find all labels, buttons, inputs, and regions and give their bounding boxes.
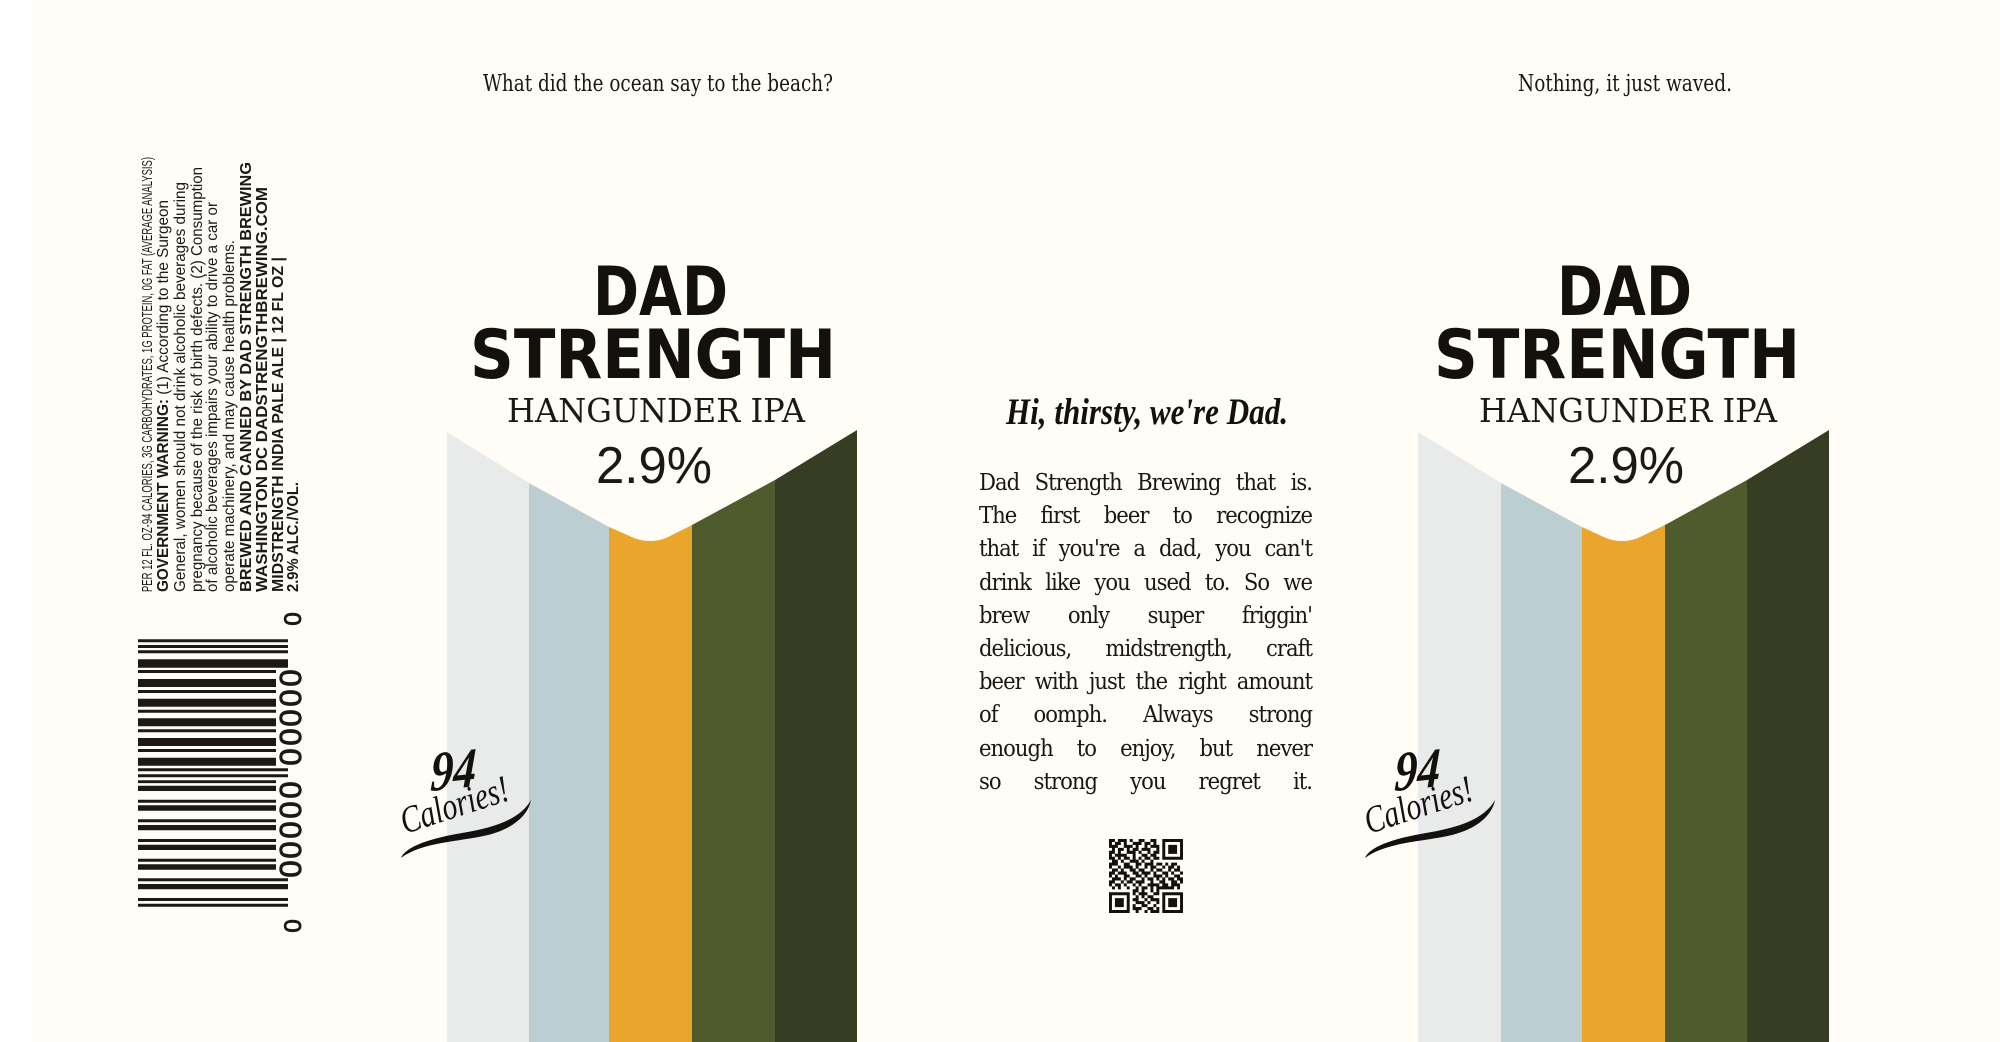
body copy: of oomph. Always strong <box>979 700 1312 728</box>
barcode digits: 0 <box>273 821 308 839</box>
brand name <box>470 253 836 395</box>
style name: HANGUNDER IPA <box>507 391 806 430</box>
abv: 2.9% <box>1568 437 1684 495</box>
government warning: of alcoholic beverages impairs your ability to drive a car or <box>204 201 221 592</box>
stripes <box>1418 430 1829 1042</box>
government warning: GOVERNMENT WARNING: (1) According to the Surgeon <box>155 200 172 592</box>
panel: left can front <box>395 253 857 1042</box>
stripes <box>447 430 857 1042</box>
panel: legal text <box>139 157 302 592</box>
calories badge <box>1359 737 1495 858</box>
calories badge: Calories! <box>1359 768 1478 843</box>
calories badge: Calories! <box>395 768 514 843</box>
answer text: Nothing, it just waved. <box>1518 71 1732 97</box>
style name: HANGUNDER IPA <box>1479 391 1778 430</box>
panel: right can front <box>1359 253 1829 1042</box>
brewer details <box>238 162 302 592</box>
brand name: DAD <box>1557 253 1692 332</box>
barcode digits: 0 <box>280 612 307 626</box>
brewer details: 2.9% ALC./VOL. <box>285 482 302 592</box>
government warning: operate machinery, and may cause health problems. <box>221 240 238 592</box>
body copy: Dad Strength Brewing that is. <box>979 468 1312 496</box>
barcode digits: 0 <box>273 860 308 878</box>
icon: qr code <box>1109 840 1183 912</box>
barcode digits: 0 <box>273 781 308 799</box>
barcode digits: 0 <box>273 728 308 746</box>
barcode digits: 0 <box>273 669 308 687</box>
brand name: STRENGTH <box>470 316 836 395</box>
calories badge: 94 <box>1394 737 1441 804</box>
barcode digits: 0 <box>273 748 308 766</box>
brewer details: MIDSTRENGTH INDIA PALE ALE | 12 FL OZ | <box>270 257 287 592</box>
body copy: drink like you used to. So we <box>979 568 1312 596</box>
calories badge: 94 <box>430 737 477 804</box>
barcode bars <box>138 639 288 907</box>
question text: What did the ocean say to the beach? <box>483 71 833 97</box>
body copy: that if you're a dad, you can't <box>979 534 1312 562</box>
calories badge <box>395 737 531 858</box>
brewer details: WASHINGTON DC DADSTRENGTHBREWING.COM <box>254 187 271 592</box>
body copy <box>979 468 1313 795</box>
government warning: General, women should not drink alcoholic beverages during <box>172 182 189 592</box>
government warning: pregnancy because of the risk of birth defects. (2) Consumption <box>189 167 206 592</box>
barcode digits: 0 <box>280 919 307 933</box>
brand name: DAD <box>593 253 728 332</box>
barcode <box>138 612 308 933</box>
barcode digits: 0 <box>273 709 308 727</box>
brewer details: BREWED AND CANNED BY DAD STRENGTH BREWING <box>238 162 255 592</box>
barcode digits: 0 <box>273 841 308 859</box>
tagline: Hi, thirsty, we're Dad. <box>1005 392 1288 433</box>
body copy: enough to enjoy, but never <box>979 734 1312 762</box>
body copy: beer with just the right amount <box>979 667 1312 695</box>
body copy: so strong you regret it. <box>979 767 1312 795</box>
brand name <box>1434 253 1800 395</box>
body copy: delicious, midstrength, craft <box>979 634 1312 662</box>
body copy: brew only super friggin' <box>979 601 1312 629</box>
barcode digits: 0 <box>273 689 308 707</box>
abv: 2.9% <box>596 437 712 495</box>
barcode digits <box>273 612 308 933</box>
barcode digits: 0 <box>273 801 308 819</box>
body copy: The first beer to recognize <box>979 501 1312 529</box>
government warning <box>155 167 238 592</box>
brand name: STRENGTH <box>1434 316 1800 395</box>
